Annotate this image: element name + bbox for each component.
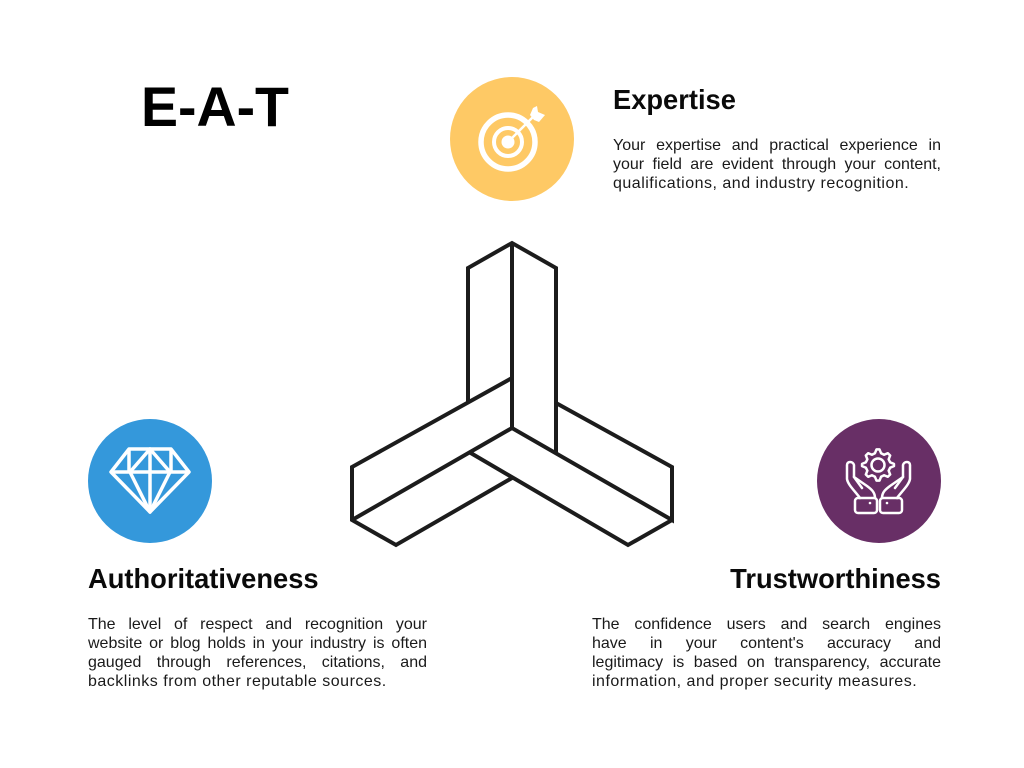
heading: Authoritativeness: Authoritativeness bbox=[88, 563, 319, 594]
heading: Expertise: Expertise bbox=[613, 84, 736, 115]
heading: Trustworthiness: Trustworthiness bbox=[730, 563, 941, 594]
text: Trustworthiness description: have in your content's accuracy and bbox=[592, 635, 941, 652]
diagram: three-armed isometric beam bbox=[350, 240, 674, 548]
text: Expertise description bbox=[613, 137, 941, 192]
text: Trustworthiness description: legitimacy is based on transparency, accurate bbox=[592, 654, 941, 671]
icon: hands holding gear on purple circle bbox=[817, 419, 941, 543]
text: Expertise description: your field are evident through your content, bbox=[613, 156, 941, 173]
text: Authoritativeness description: The level of respect and recognition your bbox=[88, 616, 427, 633]
text: Authoritativeness description: website or blog holds in your industry is often bbox=[88, 635, 427, 652]
icon: target with arrow on yellow circle bbox=[450, 77, 574, 201]
text: Authoritativeness description bbox=[88, 616, 427, 690]
text: Expertise description: Your expertise and practical experience in bbox=[613, 137, 941, 154]
text: Expertise description: qualifications, and industry recognition. bbox=[613, 175, 909, 192]
text: Trustworthiness description: information, and proper security measures. bbox=[592, 673, 917, 690]
text: Trustworthiness description: The confidence users and search engines bbox=[592, 616, 941, 633]
text: Authoritativeness description: gauged through references, citations, and bbox=[88, 654, 427, 671]
text: Trustworthiness description bbox=[592, 616, 941, 690]
title: E-A-T bbox=[141, 76, 289, 138]
icon: diamond on blue circle bbox=[88, 419, 212, 543]
text: Authoritativeness description: backlinks from other reputable sources. bbox=[88, 673, 387, 690]
